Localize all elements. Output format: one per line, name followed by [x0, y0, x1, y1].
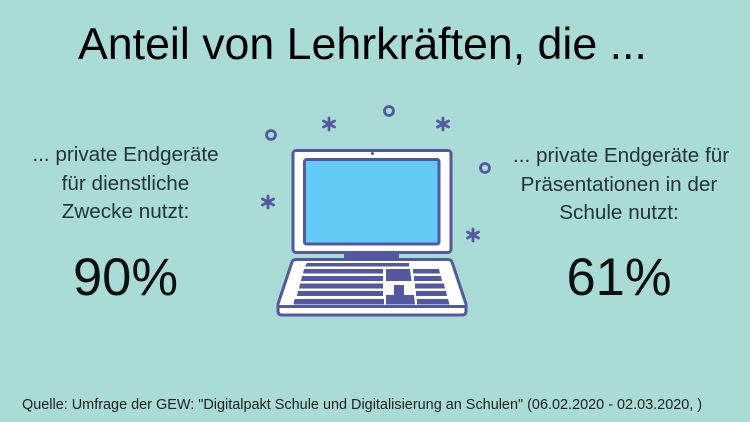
- left text block: Zwecke nutzt:: [62, 200, 189, 223]
- right text block: ... private Endgeräte für: [513, 144, 729, 167]
- keyboard keys: [294, 263, 450, 304]
- webcam: [371, 152, 374, 155]
- laptop illustration: [261, 105, 491, 316]
- source note: Quelle: Umfrage der GEW: "Digitalpakt Schule und Digitalisierung an Schulen" (06.02.2020 - 02.03.2020, ): [22, 397, 702, 413]
- laptop display: [304, 160, 439, 244]
- decorative circles: [266, 106, 490, 172]
- keyboard base: [278, 260, 466, 315]
- left percentage: 90%: [73, 248, 178, 307]
- right text block: Schule nutzt:: [559, 201, 679, 224]
- right text block: [513, 144, 729, 224]
- left text block: ... private Endgeräte: [32, 143, 219, 166]
- decorative asterisks: [262, 118, 478, 241]
- right text block: Präsentationen in der: [521, 172, 717, 196]
- left text block: [32, 143, 219, 223]
- laptop stand: [344, 252, 399, 260]
- title: Anteil von Lehrkräften, die ...: [78, 20, 647, 69]
- left text block: für dienstliche: [62, 172, 189, 194]
- laptop screen bezel: [293, 150, 451, 252]
- right percentage: 61%: [566, 248, 672, 307]
